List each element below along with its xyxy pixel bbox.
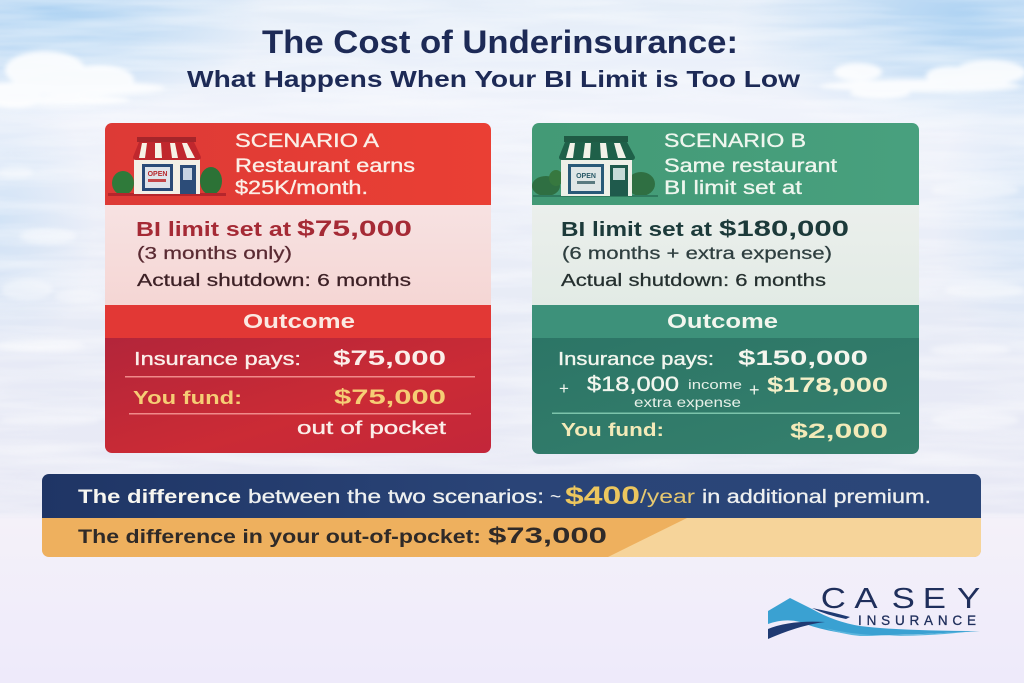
outcome figures: $75,000 (333, 347, 446, 370)
outcome figures (552, 347, 900, 443)
header text: BI limit set at (664, 178, 803, 199)
outcome figures: $150,000 (738, 347, 868, 370)
outcome figures: $2,000 (790, 420, 888, 443)
outcome figures: $178,000 (767, 374, 888, 397)
icon: red storefront (108, 137, 226, 196)
text: out-of-pocket difference: $73,000 (488, 523, 607, 548)
wordmark: INSURANCE (858, 613, 976, 628)
BI limit text: $180,000 (719, 216, 849, 241)
text: premium difference: $400 (565, 482, 640, 510)
BI limit text: $75,000 (297, 216, 412, 241)
text: premium difference: /year (640, 487, 696, 508)
header text (664, 131, 838, 199)
outcome heading: Outcome (667, 311, 778, 333)
BI limit text: Actual shutdown: 6 months (137, 270, 411, 290)
icon: green storefront (532, 136, 658, 197)
panel: scenario A (105, 123, 491, 453)
outcome figures: + (559, 379, 569, 398)
sign text: OPEN (576, 173, 596, 180)
outcome figures: + (749, 380, 760, 400)
sign text: OPEN (148, 171, 167, 178)
outcome figures: extra expense (634, 395, 741, 410)
logo: Casey Insurance (768, 582, 980, 639)
text: premium difference: in additional premium. (702, 487, 931, 508)
outcome figures: $18,000 (587, 373, 679, 396)
header text: $25K/month. (235, 178, 368, 199)
outcome figures: income (688, 377, 742, 392)
header text: SCENARIO B (664, 131, 806, 152)
outcome figures: You fund: (133, 387, 242, 408)
wordmark: CASEY (821, 582, 980, 614)
BI limit text: (3 months only) (137, 243, 292, 263)
text: premium difference: ~ (550, 487, 561, 508)
header text: SCENARIO A (235, 131, 379, 152)
panel: scenario B (532, 123, 919, 454)
outcome figures: You fund: (561, 419, 664, 440)
BI limit text: BI limit set at (561, 219, 712, 241)
text: out-of-pocket difference: The difference in your out-of-pocket: (78, 527, 481, 548)
BI limit text: Actual shutdown: 6 months (561, 270, 826, 290)
text: premium difference: between the two scenarios: (248, 487, 544, 508)
BI limit text (136, 216, 412, 290)
header text (235, 131, 415, 199)
icon: wave mountain (768, 598, 980, 639)
text: premium difference: The difference (78, 487, 241, 508)
outcome figures: Insurance pays: (558, 349, 714, 369)
title (187, 24, 801, 92)
outcome figures: $75,000 (334, 386, 446, 409)
outcome heading: Outcome (243, 311, 355, 333)
heading: subtitle: What Happens When Your BI Limit is Too Low (187, 66, 801, 92)
outcome figures (125, 347, 475, 438)
header text: Same restaurant (664, 156, 838, 177)
BI limit text (561, 216, 849, 290)
outcome figures: Insurance pays: (134, 349, 301, 369)
text: out-of-pocket difference (78, 523, 607, 548)
heading: main title: The Cost of Underinsurance: (262, 24, 738, 60)
text: premium difference (78, 482, 931, 510)
panel: bottom comparison band (42, 474, 981, 557)
BI limit text: BI limit set at (136, 219, 291, 241)
header text: Restaurant earns (235, 156, 415, 177)
BI limit text: (6 months + extra expense) (562, 243, 832, 263)
outcome figures: out of pocket (297, 418, 446, 438)
